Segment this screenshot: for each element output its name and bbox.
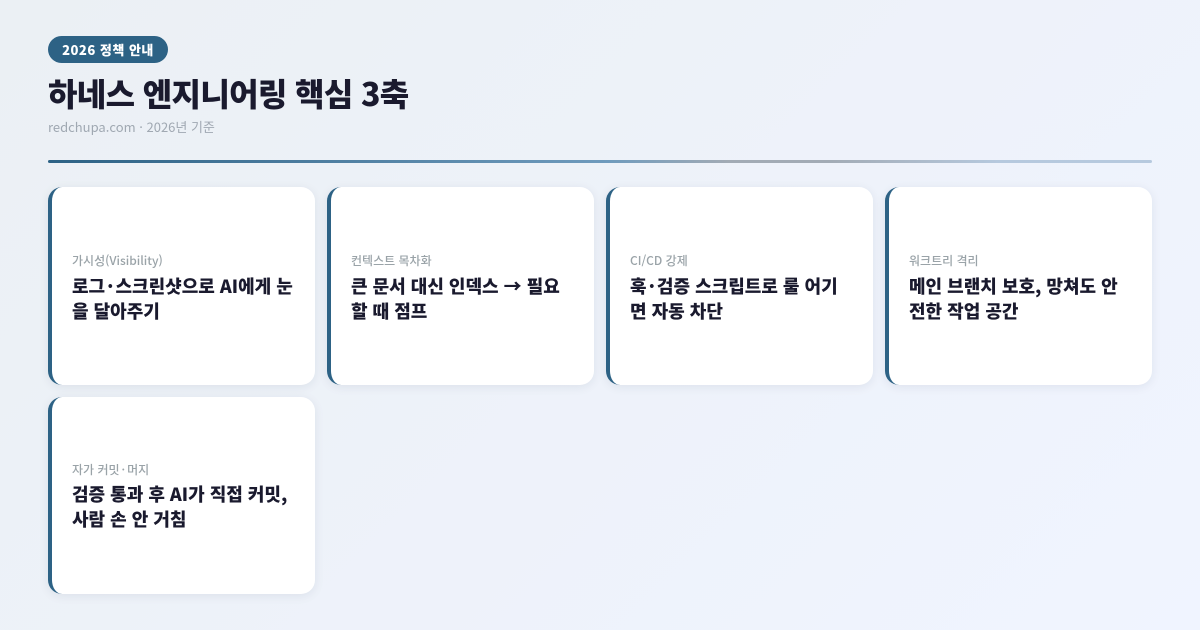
panel: CI/CD enforcement — [606, 187, 873, 385]
title: 하네스 엔지니어링 핵심 3축 — [48, 70, 409, 116]
card label: 컨텍스트 목차화 — [351, 252, 432, 269]
card label: 자가 커밋·머지 — [72, 461, 149, 478]
panel: auto commit merge — [48, 397, 315, 594]
panel: context index — [327, 187, 594, 385]
panel: visibility — [48, 187, 315, 385]
card label: CI/CD 강제 — [630, 252, 688, 269]
card text: 큰 문서 대신 인덱스 → 필요할 때 점프 — [351, 273, 560, 324]
panel: worktree isolation — [885, 187, 1152, 385]
subtitle: redchupa.com · 2026년 기준 — [48, 117, 215, 136]
card text: 검증 통과 후 AI가 직접 커밋, 사람 손 안 거침 — [72, 481, 287, 532]
badge: 2026 정책 안내 — [62, 40, 154, 59]
card text: 메인 브랜치 보호, 망쳐도 안전한 작업 공간 — [909, 273, 1118, 324]
card label: 워크트리 격리 — [909, 252, 979, 269]
card label: 가시성(Visibility) — [72, 252, 163, 269]
card text: 로그·스크린샷으로 AI에게 눈을 달아주기 — [72, 273, 293, 324]
card text: 훅·검증 스크립트로 룰 어기면 자동 차단 — [630, 273, 838, 324]
badge — [48, 36, 168, 63]
